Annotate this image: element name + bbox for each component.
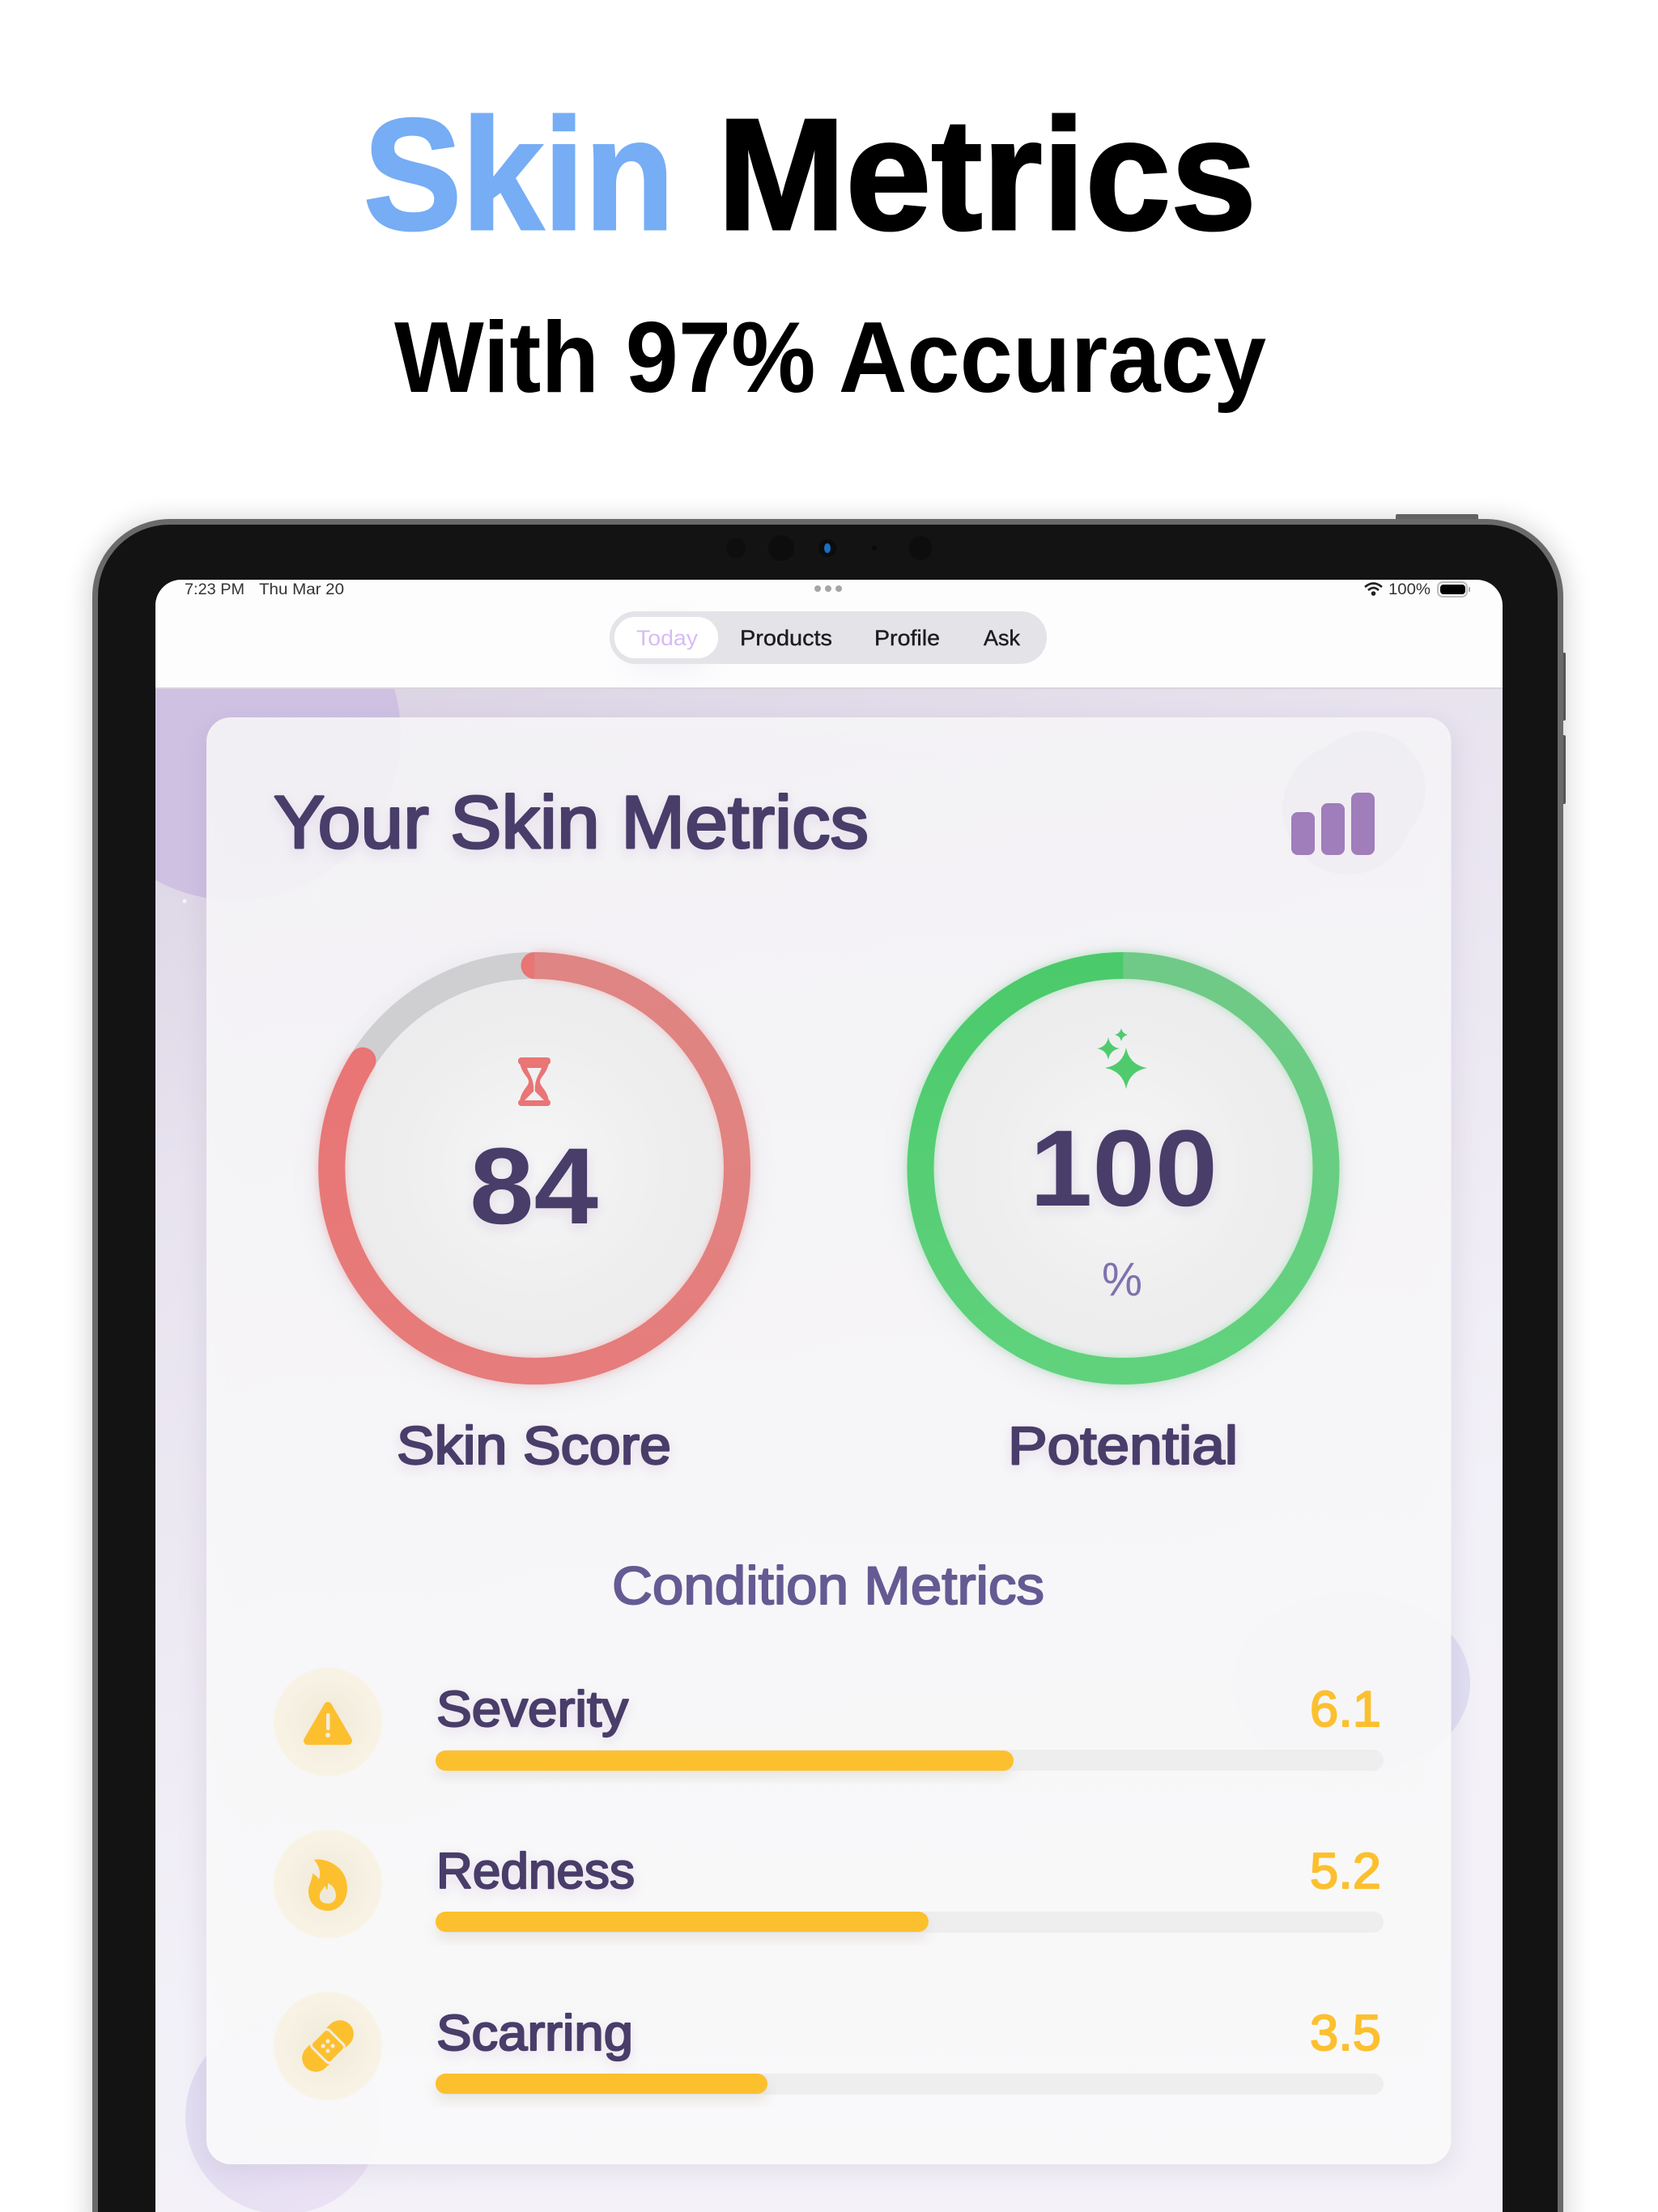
screen background gradient	[155, 688, 1503, 2212]
gauge glow	[920, 965, 1326, 1372]
icon: bar chart	[1291, 793, 1375, 855]
gauge: Potential 100%	[905, 955, 1342, 1475]
progress bar	[436, 2074, 1384, 2101]
gauge shadow	[316, 955, 753, 1392]
front camera array	[726, 535, 932, 561]
title: Skin Metrics: Metrics	[717, 86, 1256, 263]
tab labels: Profile	[874, 626, 940, 650]
metric label: Severity	[436, 1682, 628, 1738]
progress bar	[436, 1912, 1384, 1939]
gauge progress ring	[920, 965, 1326, 1372]
gauge track	[332, 965, 737, 1372]
status bar: time and date: Thu Mar 20	[259, 581, 344, 598]
metric value: 6.1	[1310, 1682, 1381, 1738]
status bar: time and date: 7:23 PM	[185, 581, 244, 598]
side volume buttons	[1561, 653, 1566, 804]
selected tab: Today: Today	[636, 626, 699, 650]
gauge label: Skin Score	[397, 1415, 671, 1475]
section heading: Condition Metrics: Condition Metrics	[612, 1555, 1044, 1615]
tablet screen	[69, 568, 1503, 2212]
title: Skin Metrics	[363, 86, 1256, 263]
icon: sparkles	[1097, 1028, 1147, 1089]
device drop shadow	[89, 519, 1567, 2212]
gauge glow	[332, 965, 738, 1371]
panel: skin metrics card	[206, 717, 1451, 2164]
status bar: wifi, battery: 100%	[1388, 581, 1431, 598]
decorative blob bottom-left	[185, 2057, 369, 2212]
metric row: Severity	[274, 1668, 1384, 1777]
status bar: wifi, battery	[1365, 581, 1470, 598]
subtitle: With 97% Accuracy: With 97% Accuracy	[394, 302, 1266, 414]
metric value: 3.5	[1310, 2006, 1381, 2061]
segmented tab bar	[610, 611, 1047, 664]
selected tab: Today	[614, 617, 718, 658]
gauge shadow	[905, 955, 1342, 1392]
top power button	[1396, 514, 1478, 524]
tab bar shadow	[656, 664, 680, 665]
metric value: 5.2	[1310, 1844, 1381, 1899]
icon: flame	[274, 1830, 382, 1938]
progress bar	[436, 1750, 1384, 1777]
status bar: time and date	[185, 583, 343, 594]
multitasking dots	[814, 585, 842, 592]
icon: warning triangle	[274, 1668, 382, 1776]
tab labels: Ask	[984, 626, 1020, 650]
percent unit: %	[1102, 1253, 1142, 1306]
gauge label: Potential	[1008, 1415, 1238, 1475]
tab labels: Products	[740, 626, 832, 650]
metric label: Scarring	[436, 2006, 633, 2061]
potential value: 100	[1030, 1108, 1218, 1229]
heading: Your Skin Metrics: Your Skin Metrics	[274, 781, 869, 864]
header bar	[155, 580, 1503, 689]
icon: hourglass	[518, 1057, 551, 1106]
gauge: Skin Score 84	[316, 952, 753, 1475]
decorative faint circles behind chart icon	[1282, 731, 1426, 874]
sparkle dots	[183, 899, 186, 904]
score value: 84	[470, 1126, 598, 1247]
tablet device frame	[89, 514, 1567, 2212]
gauge progress arc	[332, 965, 737, 1372]
metric label: Redness	[436, 1844, 635, 1899]
metric row: Scarring	[274, 1992, 1384, 2101]
icon: bandage	[274, 1992, 382, 2100]
tab labels	[742, 629, 1020, 646]
decorative blob right	[1451, 1634, 1470, 1733]
decorative blob top-left	[155, 580, 400, 898]
metric row: Redness	[274, 1830, 1384, 1939]
title: Skin Metrics: Skin	[363, 86, 674, 263]
card shadow	[202, 722, 1456, 2173]
